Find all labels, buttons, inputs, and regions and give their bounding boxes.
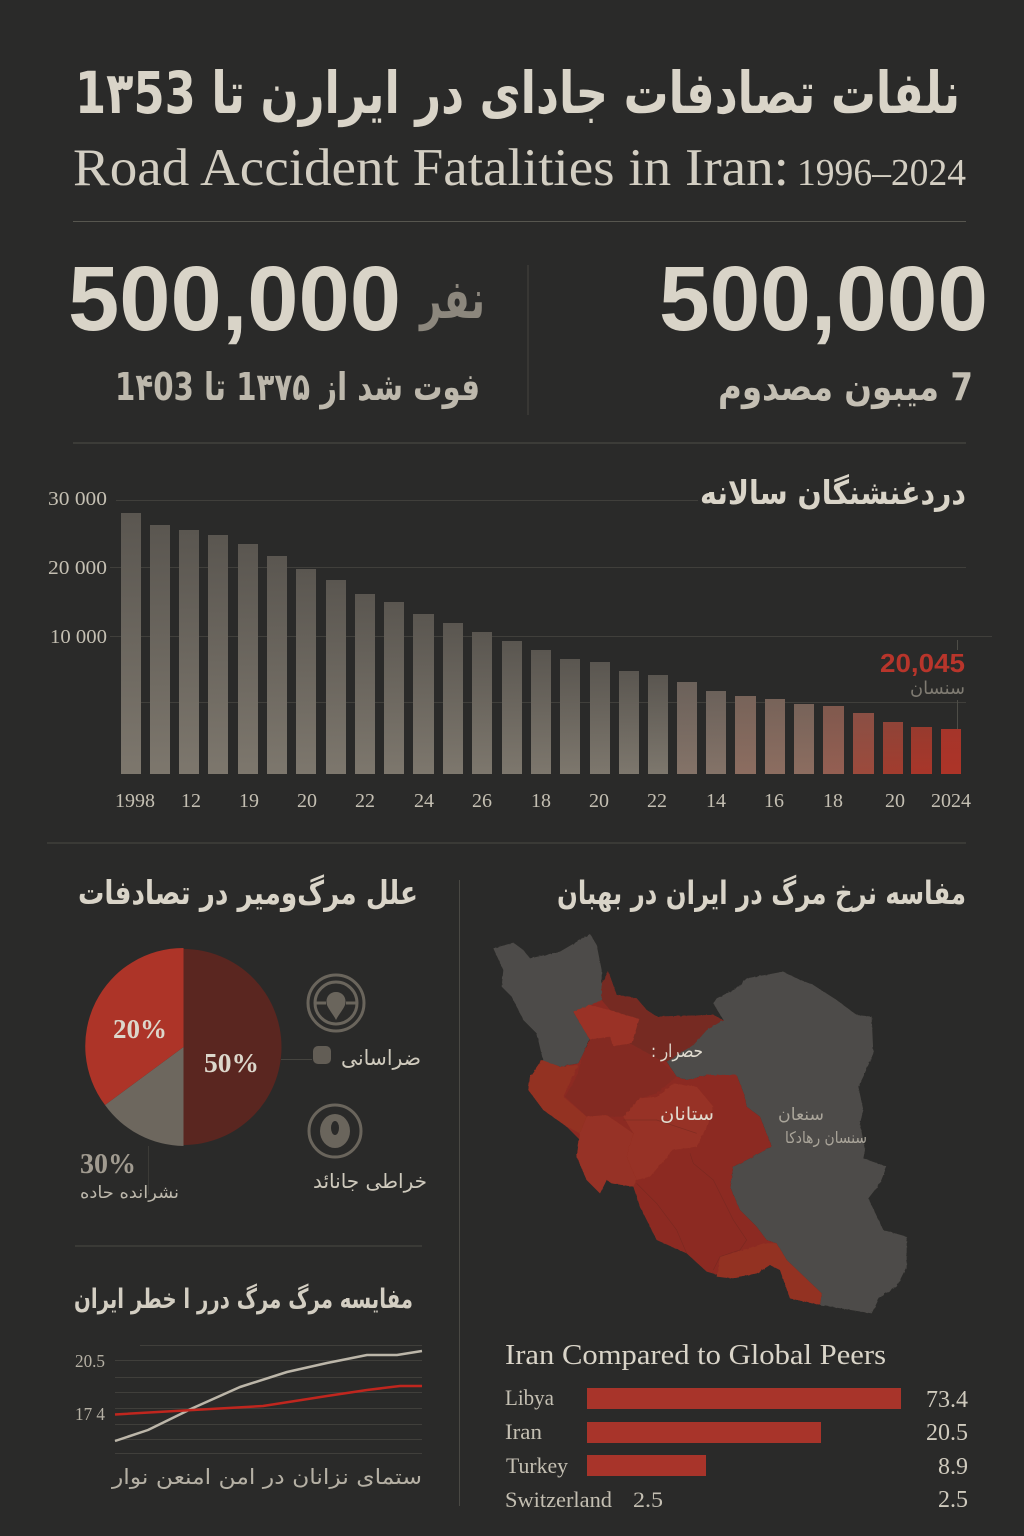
x axis labels: 19 <box>239 790 259 812</box>
subtitle: English: Road Accident Fatalities in Iran: <box>73 139 789 197</box>
peer names: Turkey <box>506 1453 568 1478</box>
x axis labels: 20 <box>589 790 609 812</box>
map labels <box>651 1041 867 1148</box>
x axis labels: 14 <box>706 790 726 812</box>
region: east <box>667 972 907 1313</box>
line chart caption: ستمای نزانان در امن امنعن نوار <box>111 1465 422 1489</box>
x axis labels: 12 <box>181 790 201 812</box>
line chart axis labels: 20.5 <box>75 1351 105 1371</box>
panel: line chart <box>74 1283 422 1489</box>
map labels: سنعان <box>778 1105 824 1125</box>
stat: injured: 7 میبون مصدوم <box>718 365 973 410</box>
line chart heading: مفایسه مرگ مرگ درر ا خطر ایران <box>74 1283 413 1315</box>
peer values: 20.5 <box>926 1420 968 1446</box>
map fault lines <box>623 1120 747 1270</box>
map labels: ستانان <box>660 1104 714 1125</box>
panel: global peers bar chart <box>505 1339 968 1513</box>
pie chart: 50% <box>204 1048 259 1078</box>
stat: deaths: 500,000 <box>68 248 401 350</box>
region: red west and south <box>528 972 822 1305</box>
peer names: Switzerland <box>505 1487 612 1512</box>
y axis labels <box>48 488 107 648</box>
map labels: حصرار : <box>651 1041 703 1062</box>
x axis labels: 18 <box>823 790 843 812</box>
icon: fault badge <box>309 1105 361 1157</box>
stat: injured: 500,000 <box>659 248 988 350</box>
peer values <box>926 1387 968 1513</box>
callout: latest value <box>876 640 968 729</box>
x axis labels: 24 <box>414 790 434 812</box>
bars <box>121 513 961 774</box>
panel: causes of death <box>78 873 427 1203</box>
x axis labels: 1998 <box>115 790 155 812</box>
x axis labels: 20 <box>885 790 905 812</box>
region: central dark <box>565 1037 677 1117</box>
cause label: vehicle: خراطی جانائد <box>313 1169 427 1193</box>
y axis labels: 20 000 <box>48 557 107 579</box>
line chart axis labels <box>75 1351 105 1424</box>
panel: annual deaths bar chart <box>48 473 992 812</box>
pie label: 30%: نشرانده حاده <box>80 1183 179 1203</box>
x axis labels: 16 <box>764 790 784 812</box>
callout: latest value: 20,045 <box>880 648 965 678</box>
subtitle: English: 1996–2024 <box>797 152 966 194</box>
y axis labels: 10 000 <box>50 626 107 648</box>
region: northwest <box>493 934 607 1067</box>
x axis labels: 20 <box>297 790 317 812</box>
cause label: speeding: ضراسانی <box>341 1046 421 1070</box>
x axis labels: 26 <box>472 790 492 812</box>
stat: deaths <box>68 248 485 409</box>
pie label: 30%: 30% <box>80 1148 136 1180</box>
peer bars <box>587 1388 901 1476</box>
line: global trend <box>115 1386 422 1414</box>
x axis labels: 22 <box>355 790 375 812</box>
map labels: سنسان رهادکا <box>785 1128 867 1148</box>
peer values: 8.9 <box>938 1454 968 1480</box>
peer names: 2.5 <box>633 1487 663 1512</box>
chart heading: دردغنشنگان سالانه <box>700 473 966 512</box>
callout: latest value: سنسان <box>910 678 965 699</box>
causes heading: علل مرگ‌ومیر در تصادفات <box>78 873 418 913</box>
region: bright patches <box>573 1005 639 1046</box>
pie label: 30% <box>80 1146 179 1203</box>
stat: deaths: فوت شد از 1۳۷۵ تا 1۴03 <box>115 365 480 409</box>
stat: deaths: نفر <box>418 268 485 331</box>
y axis labels: 30 000 <box>48 488 107 510</box>
peers heading: Iran Compared to Global Peers <box>505 1339 886 1371</box>
peer names: Iran <box>505 1419 542 1444</box>
peer values: 2.5 <box>938 1487 968 1513</box>
x axis labels <box>115 790 971 812</box>
pie chart: 20% <box>113 1014 167 1044</box>
peer values: 73.4 <box>926 1387 968 1413</box>
pie chart <box>85 948 282 1146</box>
peer names: Libya <box>505 1385 554 1410</box>
x axis labels: 18 <box>531 790 551 812</box>
peer names <box>505 1385 663 1512</box>
map of Iran <box>493 934 907 1313</box>
panel: map comparison <box>493 874 966 1313</box>
line: Iran trend <box>115 1351 422 1441</box>
x axis labels: 22 <box>647 790 667 812</box>
region: dark north <box>602 972 723 1062</box>
icon: road hazard badge <box>308 975 364 1031</box>
stat: injured <box>659 248 988 410</box>
x axis labels: 2024 <box>931 790 971 812</box>
line chart axis labels: 17 4 <box>75 1404 105 1424</box>
